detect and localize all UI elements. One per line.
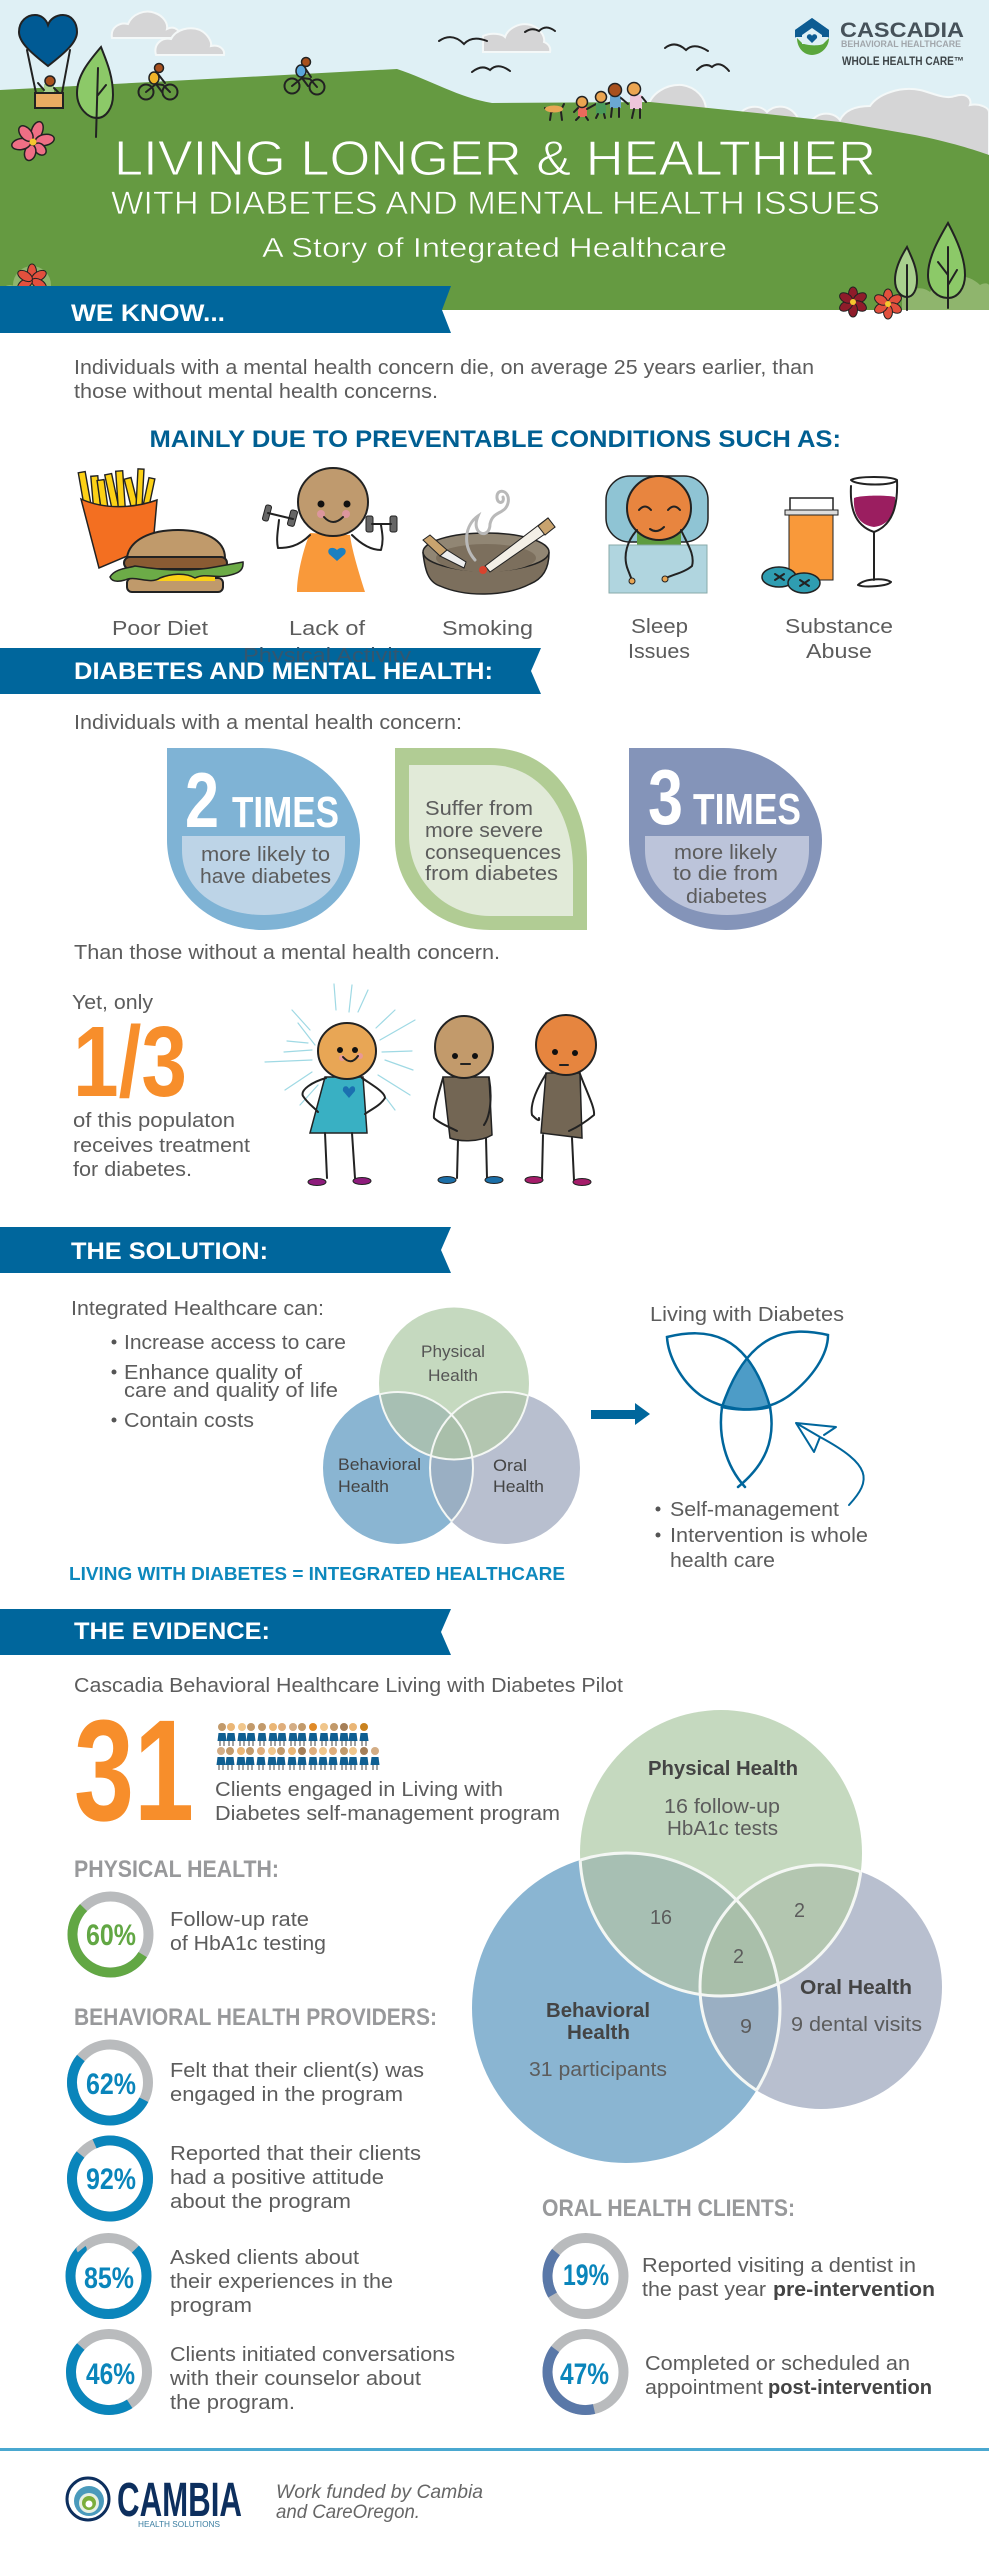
venn diagram: pilot results: Behavioral [546, 2000, 650, 2022]
arrow: to living with diabetes [591, 1403, 650, 1425]
stat ring: 47%: 47% [560, 2358, 609, 2391]
text: integrated healthcare benefits: Contain costs [124, 1410, 254, 1432]
banner: We know [0, 286, 451, 333]
text: pilot name: Cascadia Behavioral Healthcare Living with Diabetes Pilot [74, 1675, 623, 1697]
venn diagram: pilot results: 31 participants [529, 2059, 667, 2081]
heading: behavioral health providers: BEHAVIORAL HEALTH PROVIDERS: [74, 2004, 437, 2031]
venn diagram: integrated care: Health [493, 1478, 544, 1496]
logo: Cascadia [795, 18, 964, 68]
icon: ashtray with cigarettes [423, 491, 555, 594]
labels: preventable conditions: Smoking [442, 618, 533, 640]
banner: Diabetes and mental health: Physical Activity [243, 645, 411, 667]
callout: one third receive treatment [72, 992, 250, 1181]
stat ring: 85%: their experiences in the [170, 2271, 393, 2293]
stat ring: 47%: post-intervention [768, 2377, 932, 2399]
banner: The evidence [0, 1609, 451, 1655]
labels: preventable conditions: Sleep [631, 616, 688, 638]
cloud: upper left [112, 12, 224, 55]
text: integrated healthcare benefits: Increase access to care [124, 1332, 346, 1354]
stat ring: 92%: about the program [170, 2191, 351, 2213]
stat card: 3 times: more likely [674, 842, 777, 864]
healthy person with rays [265, 984, 415, 1186]
icon: person sleeping [606, 476, 708, 593]
icon: family and dog [545, 82, 646, 120]
icon: person with dumbbells [262, 468, 397, 592]
stat ring: 85%: Asked clients about [170, 2247, 359, 2269]
venn diagram: pilot results: 2 [733, 1946, 744, 1968]
venn diagram: pilot results: Oral Health [800, 1977, 912, 1999]
stat ring: 47%: appointment [645, 2377, 763, 2399]
icon: hot air balloon [19, 15, 77, 108]
stat ring: 46%: the program. [170, 2392, 295, 2414]
stat card: severe consequences: consequences [425, 842, 561, 864]
stat card: severe consequences: more severe [425, 820, 543, 842]
icon: red flowers, lower right [838, 287, 903, 319]
stat ring: 85%: 85% [84, 2262, 134, 2295]
second person [434, 1016, 503, 1184]
credit text: and CareOregon. [276, 2502, 420, 2523]
stat ring: 19%: pre-intervention [773, 2279, 935, 2301]
heading: physical health: PHYSICAL HEALTH: [74, 1856, 279, 1883]
stat card: severe consequences [395, 748, 587, 930]
stat ring: 92% [60, 2128, 421, 2229]
venn diagram: pilot results: HbA1c tests [667, 1818, 778, 1840]
stat ring: 46% [56, 2319, 455, 2425]
heading: preventable conditions: MAINLY DUE TO PREVENTABLE CONDITIONS SUCH AS: [150, 426, 841, 453]
logo: Cascadia: BEHAVIORAL HEALTHCARE [841, 39, 961, 50]
stat ring: 92%: Reported that their clients [170, 2143, 421, 2165]
icon: cyclist two [284, 58, 324, 94]
diagram: living with diabetes: Living with Diabetes [650, 1304, 844, 1326]
heading: oral health clients: ORAL HEALTH CLIENTS: [542, 2195, 795, 2222]
text block: 25 years earlier [74, 357, 814, 403]
venn diagram: pilot results: 9 [740, 2016, 752, 2038]
logo: Cambia: HEALTH SOLUTIONS [138, 2520, 220, 2529]
venn diagram: pilot results: 9 dental visits [791, 2014, 922, 2036]
green hills [0, 69, 989, 310]
labels: preventable conditions: Abuse [806, 641, 872, 663]
cloud bank: right [647, 85, 989, 160]
diagram: living with diabetes: Intervention is whole [670, 1525, 868, 1547]
stat ring: 92%: 92% [86, 2163, 136, 2196]
venn diagram: integrated care: Health [338, 1478, 389, 1496]
stat card: 3 times: TIMES [693, 785, 801, 834]
stat ring: 62%: Felt that their client(s) was [170, 2060, 424, 2082]
icon: trees, right [895, 223, 965, 310]
venn diagram: integrated care: Behavioral [338, 1456, 421, 1474]
banner: The solution [0, 1227, 451, 1273]
title: LIVING LONGER & HEALTHIER [114, 132, 876, 186]
diagram: living with diabetes: Self-management [670, 1499, 839, 1521]
icon: fries and burger [78, 469, 243, 592]
stat ring: 46%: Clients initiated conversations [170, 2344, 455, 2366]
text: than those without: Than those without a mental health concern. [74, 942, 500, 964]
stat: 31 clients: 31 [74, 1690, 194, 1851]
text block: 25 years earlier: Individuals with a mental health concern die, on average 25 years earlier, than [74, 357, 814, 379]
stat card: 2 times: TIMES [232, 788, 339, 837]
title: A Story of Integrated Healthcare [262, 232, 727, 263]
labels: preventable conditions [112, 616, 893, 663]
banner: The evidence: THE EVIDENCE: [74, 1618, 270, 1645]
stat ring: 85% [55, 2222, 393, 2330]
pictogram: 31 people [216, 1723, 380, 1770]
banner: The solution: THE SOLUTION: [71, 1238, 268, 1265]
venn diagram: pilot results: 16 [650, 1907, 672, 1929]
credit text [276, 2482, 483, 2523]
stat: 31 clients: Diabetes self-management program [215, 1803, 560, 1825]
icon: cyclist one [138, 64, 178, 100]
stat card: 2 times: 2 [185, 756, 219, 844]
title: WITH DIABETES AND MENTAL HEALTH ISSUES [111, 185, 880, 221]
banner: Diabetes and mental health: DIABETES AND MENTAL HEALTH: [74, 658, 493, 685]
venn diagram: integrated care: Oral [493, 1457, 527, 1475]
title [111, 132, 880, 263]
callout: one third receive treatment: 1/3 [73, 1006, 187, 1118]
stat card: severe consequences: from diabetes [425, 863, 558, 885]
venn diagram: integrated care [323, 1308, 580, 1544]
venn diagram: integrated care: Physical [421, 1343, 485, 1361]
stat ring: 60%: of HbA1c testing [170, 1933, 326, 1955]
logo: Cascadia: WHOLE HEALTH CARE™ [842, 56, 964, 68]
stat card: 2 times: more likely to [201, 844, 330, 866]
stat: 31 clients [74, 1690, 560, 1851]
labels: preventable conditions: Lack of [289, 618, 366, 640]
logo: Cambia [67, 2474, 242, 2529]
labels: preventable conditions: Substance [785, 616, 893, 638]
venn diagram: pilot results: Physical Health [648, 1758, 798, 1780]
banner: Diabetes and mental health [0, 645, 541, 694]
stat ring: 62%: engaged in the program [170, 2084, 403, 2106]
header illustration [0, 0, 989, 310]
stat card: 2 times: have diabetes [200, 866, 331, 888]
icon: pink flower [11, 120, 55, 162]
stat ring: 60% [58, 1882, 326, 1987]
callout: one third receive treatment: Yet, only [72, 992, 153, 1014]
stat ring: 62% [59, 2031, 424, 2134]
venn diagram: pilot results [472, 1710, 942, 2163]
stat ring: 46%: with their counselor about [169, 2368, 421, 2390]
stat ring: 47%: Completed or scheduled an [645, 2353, 910, 2375]
stat card: 3 times [629, 748, 822, 930]
venn diagram: pilot results: 2 [794, 1900, 805, 1922]
logo: Cambia: CAMBIA [117, 2474, 242, 2527]
callout: one third receive treatment: receives treatment [73, 1135, 250, 1157]
venn diagram: integrated care: Health [428, 1367, 478, 1385]
illustration: three people [265, 984, 596, 1186]
stat card: 3 times: diabetes [686, 886, 767, 908]
stat ring: 19% [534, 2224, 935, 2328]
bushes [0, 266, 989, 310]
diagram: living with diabetes [650, 1304, 868, 1572]
text: integrated healthcare benefits [71, 1298, 346, 1432]
stat ring: 46%: 46% [86, 2358, 135, 2391]
labels: preventable conditions: Issues [628, 641, 690, 663]
text: integrated healthcare benefits: Enhance quality of [124, 1362, 302, 1384]
stat ring: 62%: 62% [86, 2068, 136, 2101]
stat ring: 19%: Reported visiting a dentist in [642, 2255, 916, 2277]
text: individuals with a mental health concern: Individuals with a mental health concern: [74, 712, 462, 734]
stat card: 3 times: to die from [673, 863, 778, 885]
stat card: 3 times: 3 [648, 753, 683, 841]
text block: 25 years earlier: those without mental health concerns. [74, 381, 438, 403]
stat ring: 60%: Follow-up rate [170, 1909, 309, 1931]
cloud: centre [483, 24, 550, 52]
tagline: LIVING WITH DIABETES = INTEGRATED HEALTHCARE [69, 1564, 565, 1584]
callout: one third receive treatment: of this populaton [73, 1110, 235, 1132]
diagram: living with diabetes: health care [670, 1550, 775, 1572]
text: integrated healthcare benefits: Integrated Healthcare can: [71, 1298, 324, 1320]
stat ring: 19%: the past year [642, 2279, 766, 2301]
credit text: Work funded by Cambia [276, 2482, 483, 2503]
stat ring: 47% [540, 2326, 932, 2418]
icon: pills and wine [762, 477, 897, 593]
stat card: severe consequences: Suffer from [425, 798, 533, 820]
labels: preventable conditions: Poor Diet [112, 618, 209, 640]
stat ring: 85%: program [170, 2295, 252, 2317]
callout: one third receive treatment: for diabetes. [73, 1159, 192, 1181]
logo: Cascadia: CASCADIA [840, 19, 964, 42]
venn diagram: pilot results: 16 follow-up [664, 1796, 780, 1818]
stat ring: 19%: 19% [563, 2259, 609, 2292]
third person [525, 1015, 596, 1186]
stat card: 2 times [167, 748, 360, 930]
venn diagram: pilot results: Health [567, 2022, 630, 2044]
icon: birds [439, 28, 729, 72]
stat ring: 60%: 60% [86, 1919, 136, 1952]
stat ring: 92%: had a positive attitude [170, 2167, 384, 2189]
icon: flower, bottom left [16, 264, 48, 292]
stat: 31 clients: Clients engaged in Living with [215, 1779, 503, 1801]
text: integrated healthcare benefits: care and quality of life [124, 1380, 338, 1402]
icon: tree [77, 47, 113, 137]
banner: We know: WE KNOW... [71, 300, 225, 327]
arrow: curved pointer [796, 1423, 864, 1505]
